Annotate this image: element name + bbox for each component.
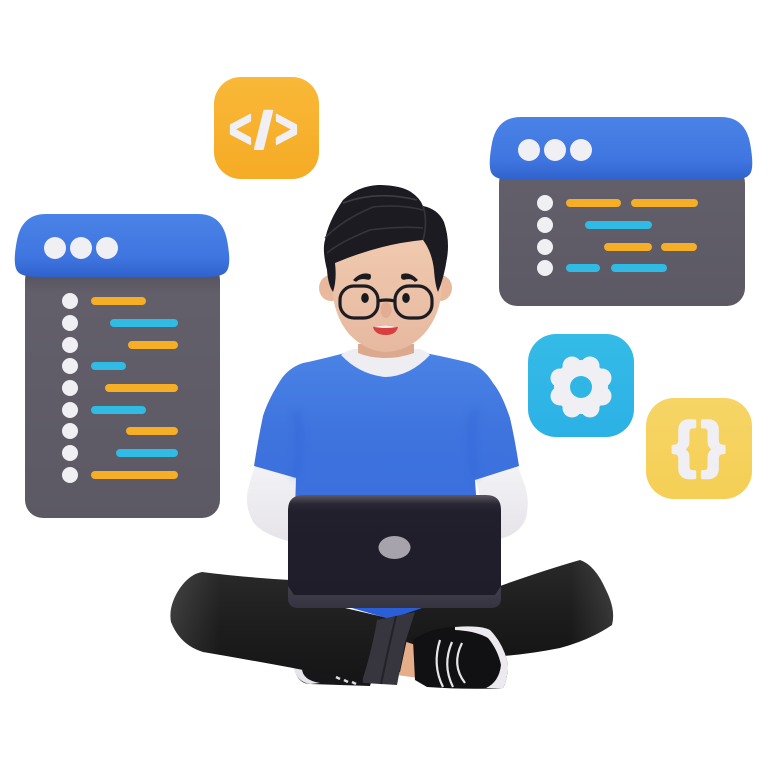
icon: code tag: [214, 77, 319, 179]
icon: curly braces: }: [701, 411, 725, 478]
panel: right code window: [490, 117, 752, 306]
arm: left white sleeve: [247, 464, 296, 541]
shoe laces: [336, 677, 356, 684]
arm: right white sleeve: [476, 465, 528, 539]
foot: front shoe: [413, 626, 508, 689]
nose: [380, 302, 392, 318]
mouth: [373, 326, 398, 335]
icon: curly braces: [646, 398, 752, 499]
panel: left code window: [15, 214, 229, 518]
pants cuff: [363, 612, 415, 685]
sleeve creases: [295, 410, 475, 478]
laptop base: [288, 570, 501, 608]
torso: blue t-shirt: [254, 347, 519, 510]
foot: ankle: [396, 640, 419, 678]
leg: right thigh: [402, 560, 614, 656]
icon: code tag: /: [254, 101, 273, 159]
leg: left thigh crossing: [170, 572, 406, 672]
bullet points: [537, 195, 553, 276]
window control dots: [518, 139, 592, 161]
icon: code tag: >: [275, 100, 298, 160]
window body: [25, 262, 220, 518]
eyes: [361, 293, 369, 303]
laptop: [288, 495, 501, 608]
window control dots: [44, 237, 118, 259]
icon: code tag: <: [229, 100, 252, 160]
icon: curly braces: {: [672, 411, 696, 478]
collar: [341, 349, 430, 377]
illustration: developer with laptop, code windows and icons: [14, 77, 752, 689]
hair: [324, 185, 448, 292]
eyebrows: [354, 274, 370, 281]
face: [332, 225, 442, 352]
window body: [499, 165, 745, 306]
torso shirt bottom peek: [345, 606, 428, 619]
neck: [358, 344, 414, 358]
code lines: [95, 301, 174, 475]
bullet points: [62, 293, 78, 483]
person: developer: [165, 185, 620, 690]
laptop logo: [378, 536, 410, 559]
glasses: [340, 286, 432, 318]
back shoe: [294, 650, 380, 686]
window header bar: [490, 117, 752, 180]
laptop lid: [288, 495, 501, 595]
window header bar: [15, 214, 229, 277]
code lines: [570, 203, 694, 268]
ears: [319, 275, 343, 301]
icon: settings gear: [528, 334, 634, 437]
